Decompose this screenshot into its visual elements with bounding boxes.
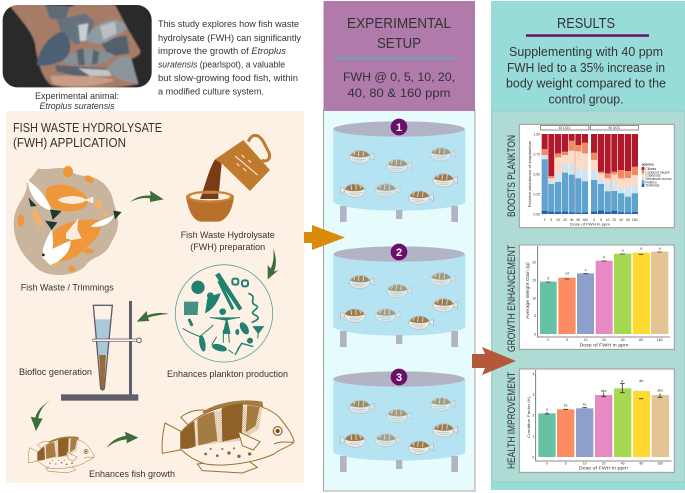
- bar chart: average weight gain: a: [640, 247, 643, 251]
- bar chart: condition factor: Condition Factor (K): [526, 396, 531, 438]
- label: biofloc: Biofloc generation: [19, 367, 92, 378]
- bar chart: condition factor: 80: [639, 461, 643, 465]
- panel heading: [13, 120, 162, 150]
- legend: [642, 163, 672, 188]
- bar chart: average weight gain: b: [603, 256, 605, 260]
- blue segment: [542, 159, 638, 214]
- bar chart: condition factor: Dose of FWH in ppm: [579, 466, 628, 471]
- label: FWH preparation: (FWH) preparation: [190, 242, 265, 253]
- bar chart: condition factor: 5: [565, 461, 567, 465]
- bar chart: average weight gain: [519, 245, 674, 349]
- intro text: improve the growth of Etroplus: [158, 46, 286, 57]
- stacked bar chart: zooplankton abundance: 10: [556, 218, 560, 222]
- arrow: small fish to large fish: [107, 432, 138, 448]
- setup header: SETUP: [377, 35, 421, 52]
- stacked bar chart: zooplankton abundance: 20: [612, 218, 616, 222]
- photo: hands holding fish: [0, 2, 155, 90]
- icon: large fish: [162, 400, 294, 473]
- tank 2: 2: [396, 247, 402, 259]
- bar chart: average weight gain: 5: [534, 314, 536, 318]
- bar chart: condition factor: 3: [532, 393, 534, 397]
- intro text: This study explores how fish waste: [158, 19, 299, 30]
- setup header: [324, 1, 475, 111]
- tank 2: [333, 244, 465, 347]
- label: fish growth: Enhances fish growth: [89, 469, 175, 480]
- bar chart: condition factor: abc: [601, 389, 607, 393]
- legend: Copepod nauplii: [645, 170, 670, 174]
- intro text: suratensis (pearlspot), a valuable: [158, 60, 285, 70]
- bar chart: average weight gain: 20: [602, 338, 606, 342]
- stacked bar chart: zooplankton abundance: 80: [576, 218, 580, 222]
- stacked bar chart: zooplankton abundance: 5: [600, 218, 602, 222]
- setup header: EXPERIMENTAL: [347, 15, 451, 32]
- stacked bar chart: zooplankton abundance: 160: [582, 218, 588, 222]
- photo caption: Experimental animal:: [35, 91, 119, 101]
- bar chart: condition factor: bc: [583, 402, 587, 406]
- intro text: a modified culture system.: [158, 86, 264, 98]
- stacked bar chart: zooplankton abundance: Dose of FWH in ppm: [570, 222, 611, 227]
- stacked bar chart: zooplankton abundance: [519, 124, 674, 228]
- bar chart: condition factor: 10: [583, 461, 587, 465]
- bar chart: condition factor: a: [546, 407, 549, 411]
- bar chart: average weight gain: c: [585, 268, 587, 272]
- bar chart: condition factor: 4: [532, 372, 534, 376]
- bar chart: condition factor: 0: [546, 461, 548, 465]
- bar chart: condition factor: 0: [532, 455, 534, 459]
- arrow: preparation to plankton: [268, 248, 279, 279]
- results inner panel: [492, 111, 685, 482]
- stacked bar chart: zooplankton abundance: 0: [544, 218, 546, 222]
- intro text: but slow-growing food fish, within: [158, 73, 298, 84]
- icon: small fish: [28, 436, 94, 473]
- stacked bar chart: zooplankton abundance: 0.75: [534, 152, 540, 156]
- intro text: hydrolysate (FWH) can significantly: [158, 33, 301, 44]
- legend: Nematode worms: [645, 177, 672, 181]
- bar chart: condition factor: 1: [532, 434, 534, 438]
- bar chart: average weight gain: 15: [532, 278, 536, 282]
- tank 3: [333, 369, 465, 472]
- arrow: waste to preparation: [130, 191, 164, 202]
- results summary: control group.: [548, 92, 624, 106]
- bar chart: average weight gain: Dose of FWH in ppm: [579, 343, 629, 348]
- cream segment: [542, 151, 638, 214]
- panel heading: (FWH) APPLICATION: [13, 135, 126, 150]
- legend: Tintinnids: [645, 184, 660, 188]
- stacked bar chart: zooplankton abundance: 0.50: [534, 172, 540, 176]
- bar chart: average weight gain: Average Weight Gain (g): [525, 262, 530, 319]
- icon: imhoff cone on stand: [61, 301, 141, 401]
- bar chart: condition factor: [519, 369, 674, 472]
- bar chart: average weight gain: 80: [639, 338, 643, 342]
- stacked bar chart: zooplankton abundance: 1.00: [534, 132, 540, 136]
- label: growth enhancement: GROWTH ENHANCEMENT: [506, 245, 518, 352]
- orange segment: [542, 141, 638, 214]
- results heading: RESULTS: [557, 15, 615, 32]
- intro text: [158, 19, 301, 98]
- icon: plankton circle: [175, 265, 273, 362]
- bar chart: condition factor: 2: [532, 414, 534, 418]
- icon: bowl and pitcher: [186, 135, 270, 222]
- results summary: FWH led to a 35% increase in: [507, 61, 665, 75]
- label: health improvement: HEALTH IMPROVEMENT: [506, 372, 518, 469]
- bar chart: average weight gain: d: [547, 277, 549, 281]
- bar chart: condition factor: 40: [621, 461, 625, 465]
- setup header: FWH @ 0, 5, 10, 20,: [343, 72, 455, 84]
- red segment: [542, 134, 638, 214]
- arrow: setup to results: [472, 347, 516, 375]
- results summary: Supplementing with 40 ppm: [509, 45, 663, 59]
- bar chart: average weight gain: cd: [565, 272, 569, 276]
- arrow: biofloc to fish: [31, 400, 50, 431]
- stacked bar chart: zooplankton abundance: 160: [632, 218, 638, 222]
- arrow: application to setup: [304, 225, 345, 250]
- tank 1: 1: [396, 122, 402, 134]
- results heading: [526, 15, 649, 37]
- bar chart: condition factor: abc: [657, 389, 663, 393]
- legend: Ciliates: [645, 167, 657, 171]
- legend: Rotifers: [645, 180, 657, 184]
- bar chart: average weight gain: 160: [657, 338, 663, 342]
- panel: experimental setup: [324, 1, 475, 491]
- bar chart: average weight gain: 20: [532, 260, 536, 264]
- stacked bar chart: zooplankton abundance: 40: [570, 218, 574, 222]
- bar chart: condition factor: 160: [658, 461, 663, 465]
- stacked bar chart: zooplankton abundance: Relative abundance of zooplankton: [527, 141, 532, 207]
- bar chart: average weight gain: 10: [532, 296, 536, 300]
- stacked bar chart: zooplankton abundance: 0.00: [534, 212, 540, 216]
- bar chart: average weight gain: 0: [547, 338, 549, 342]
- photo caption: Etroplus suratensis: [40, 101, 115, 111]
- setup header: 40, 80 & 160 ppm: [348, 88, 450, 100]
- label: boosts plankton: BOOSTS PLANKTON: [506, 135, 518, 217]
- bar chart: average weight gain: a: [659, 246, 662, 250]
- panel: fish waste hydrolysate application: [6, 111, 304, 483]
- stacked bar chart: zooplankton abundance: 10: [606, 218, 610, 222]
- photo caption: [35, 91, 119, 111]
- bar chart: average weight gain: 5: [566, 338, 568, 342]
- icon: fish waste pile: [14, 166, 122, 275]
- bar chart: average weight gain: 0: [534, 332, 536, 336]
- tank 1: [333, 119, 465, 222]
- bar chart: average weight gain: 10: [584, 338, 588, 342]
- legend: Copepods: [645, 174, 661, 178]
- arrow: plankton to biofloc: [137, 311, 169, 322]
- dark blue segment: [542, 211, 638, 214]
- bar chart: condition factor: 20: [602, 461, 606, 465]
- whole fish: [27, 180, 52, 211]
- stacked bar chart: zooplankton abundance: 0: [593, 218, 595, 222]
- label: FWH preparation: Fish Waste Hydrolysate: [181, 230, 275, 241]
- fish skeleton: [58, 196, 93, 204]
- tank 3: 3: [396, 372, 402, 384]
- results summary: body weight compared to the: [506, 76, 666, 90]
- stacked bar chart: zooplankton abundance: 45 DOC: [559, 126, 571, 130]
- panel: results: [491, 1, 685, 490]
- stacked bar chart: zooplankton abundance: 40: [619, 218, 623, 222]
- results summary: [506, 45, 666, 106]
- label: FWH preparation: [181, 230, 275, 253]
- bar chart: condition factor: a: [621, 379, 624, 383]
- label: plankton: Enhances plankton production: [167, 369, 288, 380]
- legend: species: [642, 163, 654, 167]
- bar chart: condition factor: bc: [564, 403, 568, 407]
- stacked bar chart: zooplankton abundance: 90 DOC: [608, 126, 621, 130]
- label: fish waste: Fish Waste / Trimmings: [21, 283, 114, 294]
- stacked bar chart: zooplankton abundance: 20: [563, 218, 567, 222]
- bar chart: condition factor: ab: [639, 379, 643, 383]
- stacked bar chart: zooplankton abundance: 5: [550, 218, 552, 222]
- pale blue segment: [542, 155, 638, 214]
- bar chart: average weight gain: 40: [621, 338, 625, 342]
- bar chart: average weight gain: a: [622, 249, 625, 253]
- panel heading: FISH WASTE HYDROLYSATE: [13, 120, 162, 135]
- stacked bar chart: zooplankton abundance: 0.25: [534, 192, 540, 196]
- stacked bar chart: zooplankton abundance: 80: [626, 218, 630, 222]
